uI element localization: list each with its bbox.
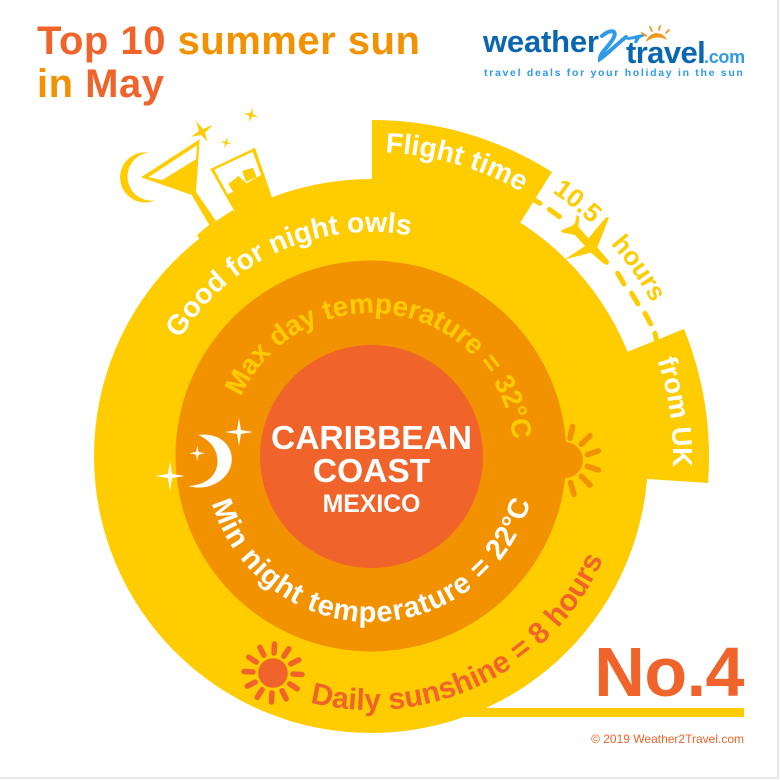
- logo: weather2travel: travel deals for your holiday in the sun: [484, 67, 745, 79]
- icon: half sun on orange ring: [547, 427, 598, 494]
- label: good for night owls: Good for night owls: [167, 212, 410, 335]
- rank underline: [458, 708, 744, 717]
- title: in May: [37, 62, 165, 106]
- centre circle: [260, 345, 483, 568]
- label: max day temperature: Max day temperature = 32°C: [224, 298, 531, 438]
- logo: weather2travel: travel: [626, 35, 705, 70]
- label: 10.5: 10.5: [554, 181, 602, 222]
- icon: martini glass: [141, 139, 216, 225]
- centre location label: [271, 420, 472, 518]
- label: min night temperature: Min night temperature = 22°C: [212, 498, 528, 628]
- title: [37, 19, 420, 106]
- icon: tumbler glass: [210, 148, 272, 215]
- rank number: No.4: [594, 633, 745, 711]
- label: daily sunshine: Daily sunshine = 8 hours: [312, 555, 601, 716]
- icon: crescent moon and stars: [155, 418, 253, 491]
- centre location label: CARIBBEAN: [271, 420, 472, 457]
- label: hours: hours: [612, 233, 662, 300]
- copyright: © 2019 Weather2Travel.com: [591, 732, 744, 746]
- label: flight time: Flight time: [387, 133, 526, 190]
- centre location label: COAST: [313, 453, 431, 490]
- orange ring: [176, 260, 566, 652]
- icon: sparkle stars: [191, 106, 260, 150]
- title: Top 10 summer sun: [37, 19, 420, 63]
- logo: weather2travel: .com: [704, 47, 745, 67]
- centre location label: MEXICO: [323, 491, 420, 518]
- icon: sun: [243, 643, 303, 703]
- logo: weather2travel: weather: [482, 24, 599, 59]
- yellow outer disc with flight and UK sectors: [94, 120, 709, 733]
- label: from UK: from UK: [658, 356, 692, 467]
- icon: moon behind cocktail: [120, 152, 155, 202]
- logo: weather2travel: [482, 24, 745, 79]
- icon: plane and dashed flight route: [534, 200, 657, 341]
